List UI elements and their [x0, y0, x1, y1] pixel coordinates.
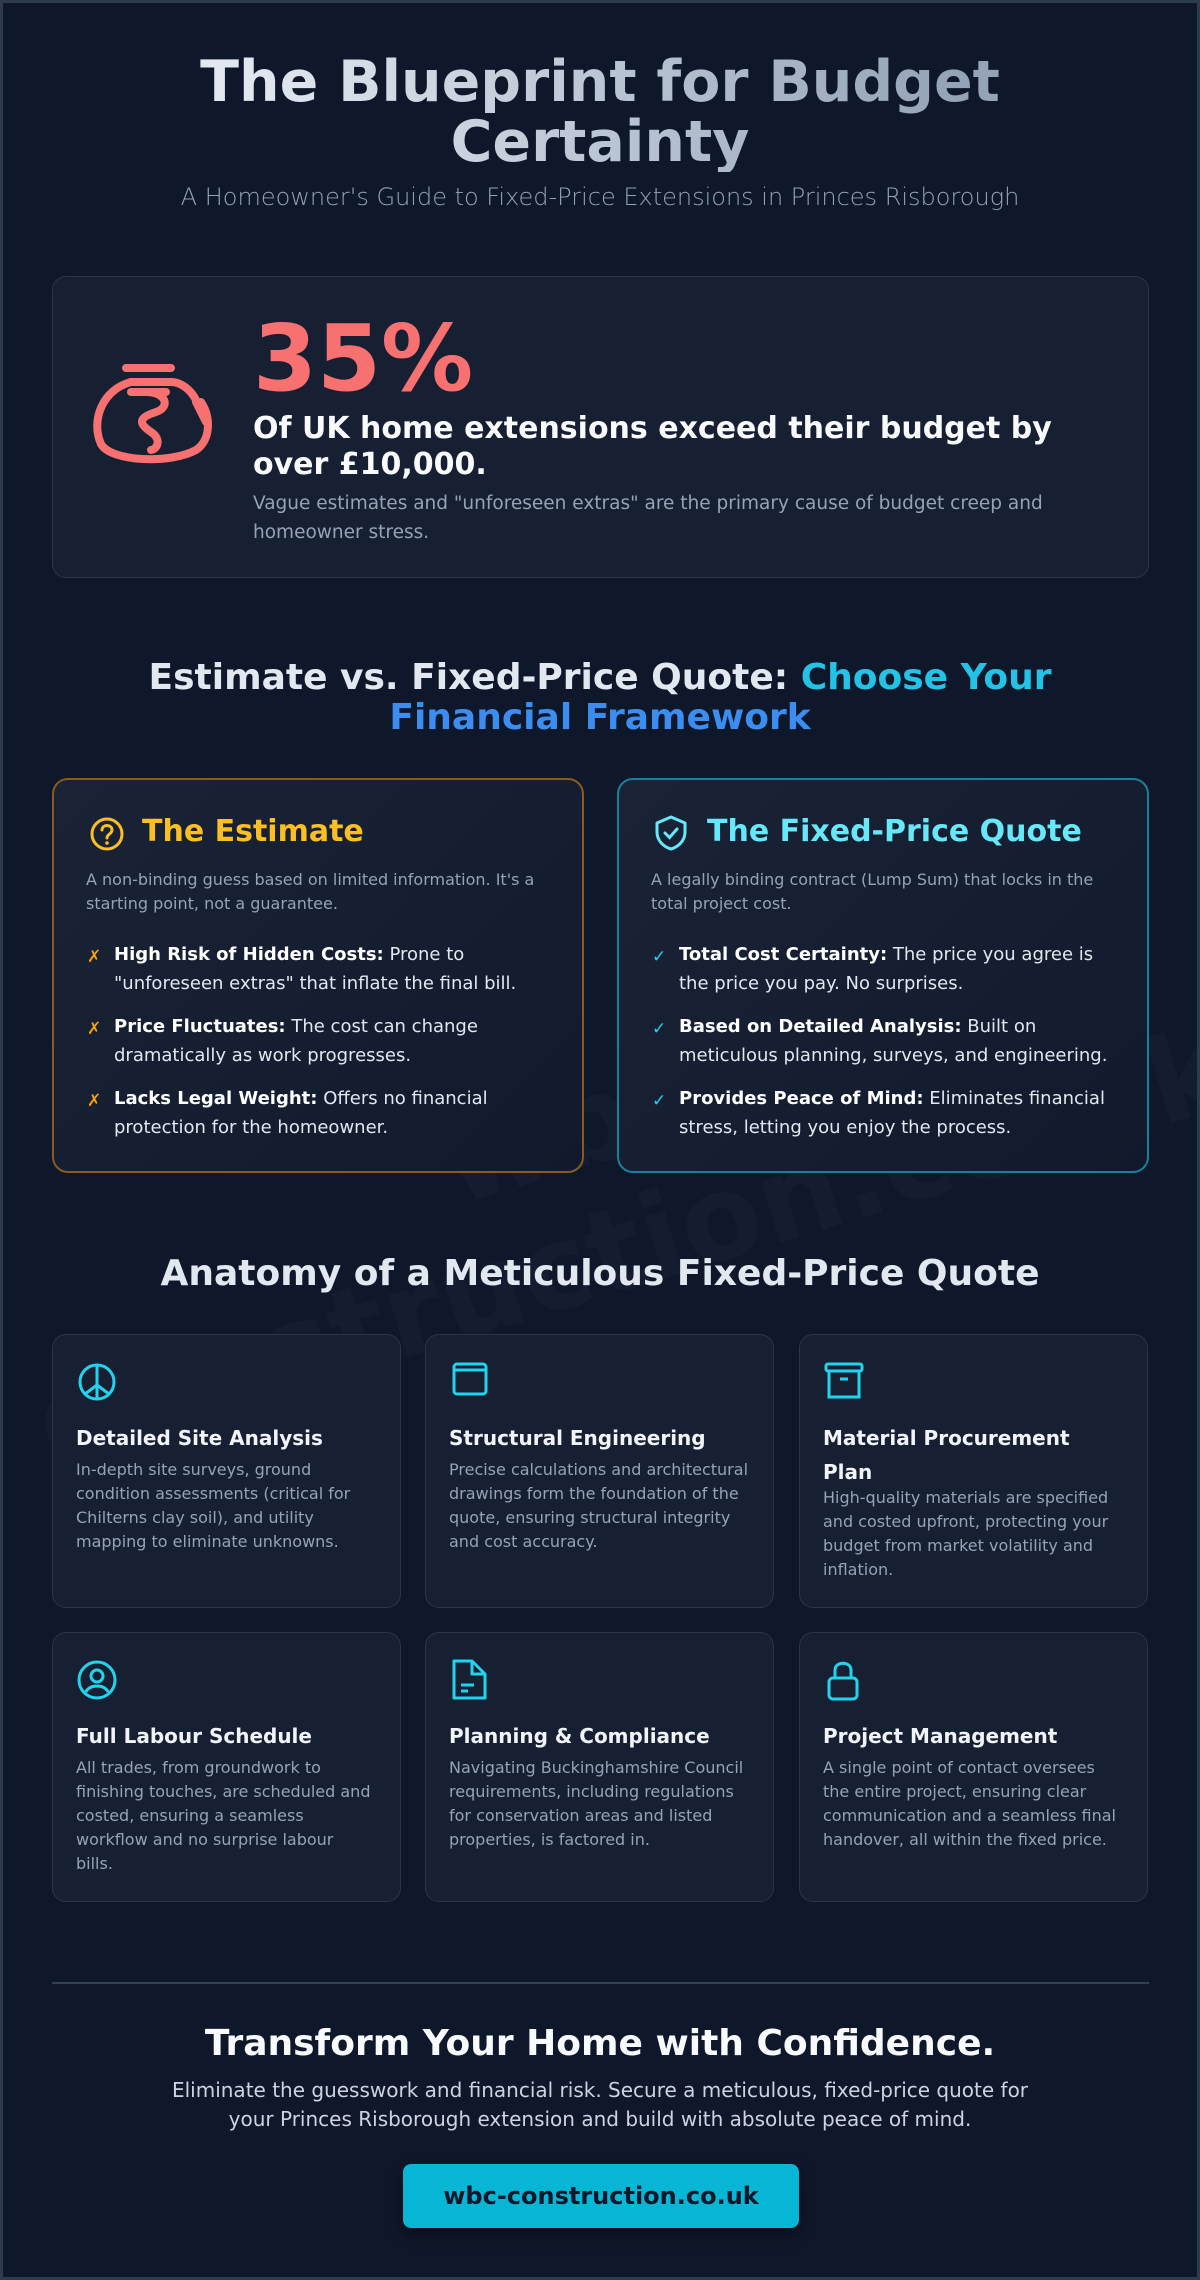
title: The Blueprint for Budget: [200, 49, 1000, 115]
section heading: anatomy: Anatomy of a Meticulous Fixed-Price Quote: [160, 1253, 1040, 1294]
bullet list: Lacks Legal Weight: Offers no financial protection for the homeowner.: [114, 1088, 488, 1138]
card: material procurement: [799, 1334, 1148, 1608]
card: site analysis: In-depth site surveys, ground condition assessments (critical for Chilterns clay soil), and utility mapping to eliminate unknowns.: [76, 1460, 350, 1551]
icon: money bag: [93, 364, 212, 464]
icon: question: [90, 818, 124, 850]
icon: shield: [656, 816, 686, 850]
bullet list: ✓: [652, 947, 666, 967]
card: structural engineering: [425, 1334, 774, 1608]
panel: fixed-price quote: [617, 778, 1149, 1173]
description: A non-binding guess based on limited information. It's a starting point, not a guarantee.: [86, 870, 534, 913]
card: material procurement: Material Procurement Plan: [823, 1426, 1070, 1484]
card: project management: A single point of contact oversees the entire project, ensuring clear communication and a seamless final handover, all within the fixed price.: [823, 1758, 1116, 1849]
title: [3, 52, 1197, 172]
heading: fixed-price quote: The Fixed-Price Quote: [707, 814, 1082, 849]
card: project management: [799, 1632, 1148, 1902]
panel: the estimate: [52, 778, 584, 1173]
stat number: 35%: [253, 305, 473, 412]
card: material procurement: High-quality materials are specified and costed upfront, protecting your budget from market volatility and inflation.: [823, 1488, 1108, 1579]
CTA heading: Transform Your Home with Confidence.: [205, 2023, 995, 2064]
section heading: comparison: [148, 657, 1052, 738]
bullet list: Based on Detailed Analysis: Built on meticulous planning, surveys, and engineering.: [679, 1016, 1107, 1066]
bullet list: ✗: [87, 947, 101, 967]
bullet list: ✗: [87, 1091, 101, 1111]
bullet list: Provides Peace of Mind: Eliminates financial stress, letting you enjoy the process.: [679, 1088, 1105, 1138]
section heading: comparison: Financial Framework: [389, 697, 811, 738]
CTA button: wbc-construction.co.uk: [443, 2182, 759, 2210]
card: planning: Planning & Compliance: [449, 1724, 710, 1748]
card: labour schedule: Full Labour Schedule: [76, 1724, 312, 1748]
card: planning: Navigating Buckinghamshire Council requirements, including regulations for conservation areas and listed properties, is factored in.: [449, 1758, 743, 1849]
bullet list: ✗: [87, 1019, 101, 1039]
watermark: wbc-: [424, 1009, 764, 1232]
card: site analysis: Detailed Site Analysis: [76, 1426, 323, 1450]
CTA text: Eliminate the guesswork and financial risk. Secure a meticulous, fixed-price quote for your Princes Risborough extension and build with absolute peace of mind.: [172, 2078, 1028, 2131]
CTA button: [403, 2164, 799, 2228]
icon: archive: [824, 1362, 864, 1398]
bullet list: [87, 944, 516, 1138]
bullet list: ✓: [652, 1091, 666, 1111]
panel: stat card: [52, 276, 1149, 578]
heading: the estimate: The Estimate: [142, 814, 364, 849]
stat headline: Of UK home extensions exceed their budget by over £10,000.: [253, 411, 1052, 482]
description: A legally binding contract (Lump Sum) that locks in the total project cost.: [651, 870, 1093, 913]
icon: peace: [78, 1364, 116, 1400]
card: labour schedule: [52, 1632, 401, 1902]
subtitle: A Homeowner's Guide to Fixed-Price Extensions in Princes Risborough: [181, 183, 1019, 211]
card: structural engineering: Structural Engineering: [449, 1426, 706, 1450]
bullet list: Total Cost Certainty: The price you agree is the price you pay. No surprises.: [679, 944, 1093, 994]
card: project management: Project Management: [823, 1724, 1057, 1748]
icon: user: [78, 1660, 116, 1700]
icon: document: [452, 1660, 486, 1700]
card: site analysis: [52, 1334, 401, 1608]
icon: lock: [828, 1662, 858, 1700]
divider: [52, 1982, 1149, 1984]
card: labour schedule: All trades, from groundwork to finishing touches, are scheduled and costed, ensuring a seamless workflow and no surprise labour bills.: [76, 1758, 370, 1873]
bullet list: Price Fluctuates: The cost can change dramatically as work progresses.: [114, 1016, 478, 1066]
title: Certainty: [451, 109, 749, 175]
icon: box: [452, 1362, 488, 1396]
bullet list: ✓: [652, 1019, 666, 1039]
stat description: Vague estimates and "unforeseen extras" are the primary cause of budget creep and homeowner stress.: [253, 493, 1043, 543]
card: planning: [425, 1632, 774, 1902]
bullet list: High Risk of Hidden Costs: Prone to "unforeseen extras" that inflate the final bill.: [114, 944, 516, 994]
bullet list: [652, 944, 1107, 1138]
section heading: comparison: Estimate vs. Fixed-Price Quote: Choose Your: [148, 657, 1051, 698]
card: structural engineering: Precise calculations and architectural drawings form the foundation of the quote, ensuring structural integrity and cost accuracy.: [449, 1460, 748, 1551]
